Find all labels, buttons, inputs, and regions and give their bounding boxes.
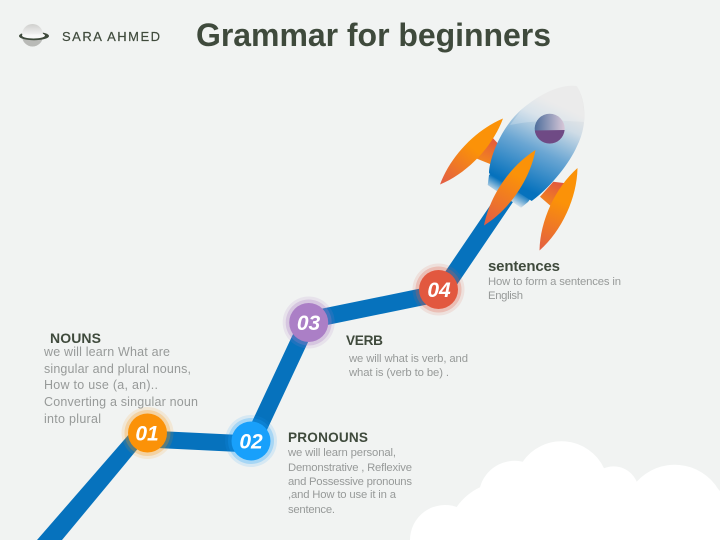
description: nouns: singular and plural nouns, <box>44 362 191 376</box>
logo <box>19 24 160 46</box>
marker 04: 04 <box>427 279 451 302</box>
description: sentences: English <box>488 290 523 302</box>
marker 04 <box>412 264 464 316</box>
heading: pronouns: PRONOUNS <box>288 430 368 445</box>
path line <box>37 178 519 540</box>
description: nouns: into plural <box>44 412 101 426</box>
description: pronouns: Demonstrative , Reflexive <box>288 462 412 474</box>
marker 02: 02 <box>239 430 263 454</box>
description: pronouns: ,and How to use it in a <box>288 489 397 501</box>
heading: sentences: sentences <box>488 258 560 275</box>
icon: ringed planet <box>19 24 49 46</box>
description: pronouns <box>287 447 412 516</box>
text block: sentences <box>488 258 621 302</box>
rocket nose highlight <box>510 86 584 125</box>
description: pronouns: sentence. <box>288 504 335 516</box>
left fin strut <box>473 137 499 164</box>
marker 02 <box>225 415 277 467</box>
text block: nouns <box>43 330 198 426</box>
marker 03 <box>283 296 335 348</box>
description: nouns: How to use (a, an).. <box>44 378 158 392</box>
text block: pronouns <box>287 430 412 516</box>
description: nouns <box>43 345 198 426</box>
description: pronouns: we will learn personal, <box>287 447 396 459</box>
logo text: SARA AHMED <box>62 29 160 44</box>
window <box>535 114 565 144</box>
text block: verb <box>346 333 468 379</box>
description: verb: what is (verb to be) . <box>348 367 449 379</box>
description: sentences <box>488 276 621 302</box>
marker 01: 01 <box>135 422 159 446</box>
center fin <box>484 150 536 226</box>
heading: nouns: NOUNS <box>50 330 101 346</box>
rocket <box>440 86 584 251</box>
marker 03: 03 <box>297 312 320 335</box>
description: pronouns: and Possessive pronouns <box>288 476 412 488</box>
heading: verb: VERB <box>346 333 383 348</box>
description: nouns: Converting a singular noun <box>44 395 198 409</box>
right fin <box>540 168 578 250</box>
description: verb <box>348 353 468 379</box>
nozzle <box>488 170 531 208</box>
description: sentences: How to form a sentences in <box>488 276 621 288</box>
description: verb: we will what is verb, and <box>348 353 468 365</box>
cloud <box>410 441 720 540</box>
right fin strut <box>540 182 566 208</box>
description: nouns: we will learn What are <box>43 345 170 359</box>
rocket body <box>489 86 584 201</box>
title: Grammar for beginners <box>196 17 551 53</box>
left fin <box>440 118 503 184</box>
marker 01 <box>122 407 174 459</box>
